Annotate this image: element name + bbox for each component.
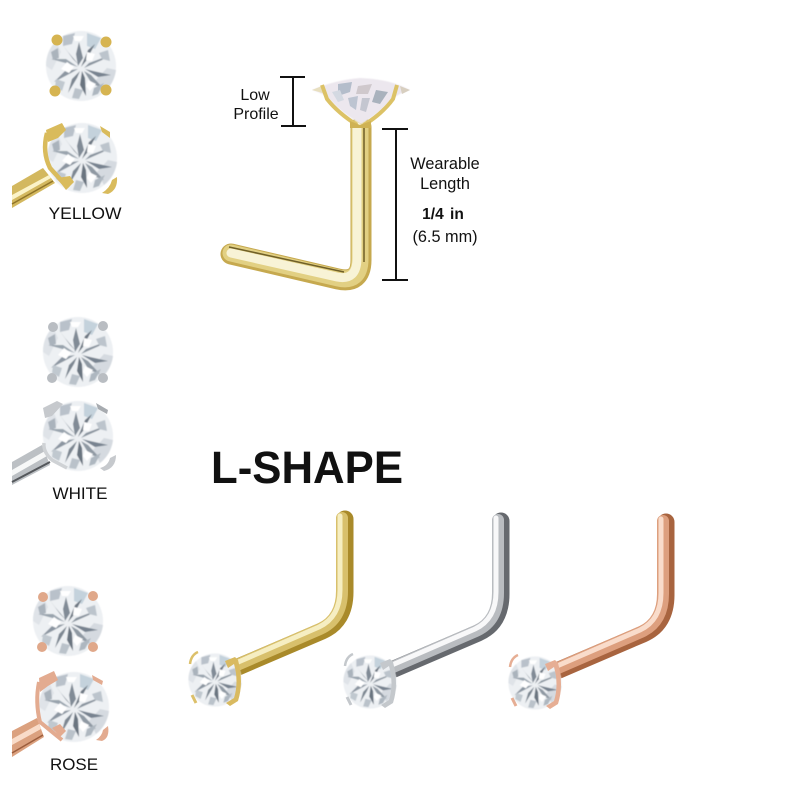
- product: rose stud: [508, 519, 666, 710]
- product: white stud: [343, 518, 501, 709]
- stud: yellow front: [46, 31, 116, 101]
- dimension: low profile bracket: [280, 77, 306, 126]
- stud: white side: [12, 401, 116, 485]
- stud: rose front: [33, 586, 103, 656]
- diagram: gold L-shaped stud: [229, 78, 410, 280]
- heading: L-SHAPE: L-SHAPE: [211, 442, 403, 493]
- label: wearable length: Wearable: [410, 155, 480, 173]
- label: yellow: YELLOW: [48, 205, 122, 223]
- label: low profile: Profile: [233, 106, 279, 123]
- label: wearable length: [410, 155, 480, 246]
- label: rose: ROSE: [50, 756, 98, 774]
- stud: white front: [43, 317, 113, 387]
- stud: rose side: [12, 671, 109, 757]
- dimension: wearable length bracket: [382, 129, 408, 280]
- label: white: WHITE: [52, 485, 108, 503]
- product: yellow gold stud: [188, 516, 345, 707]
- label: wearable length: 1/4 in: [422, 206, 464, 223]
- label: wearable length: (6.5 mm): [412, 228, 478, 246]
- stud: yellow side: [12, 123, 117, 208]
- label: low profile: [233, 87, 279, 123]
- label: wearable length: Length: [420, 175, 470, 193]
- label: low profile: Low: [240, 87, 270, 104]
